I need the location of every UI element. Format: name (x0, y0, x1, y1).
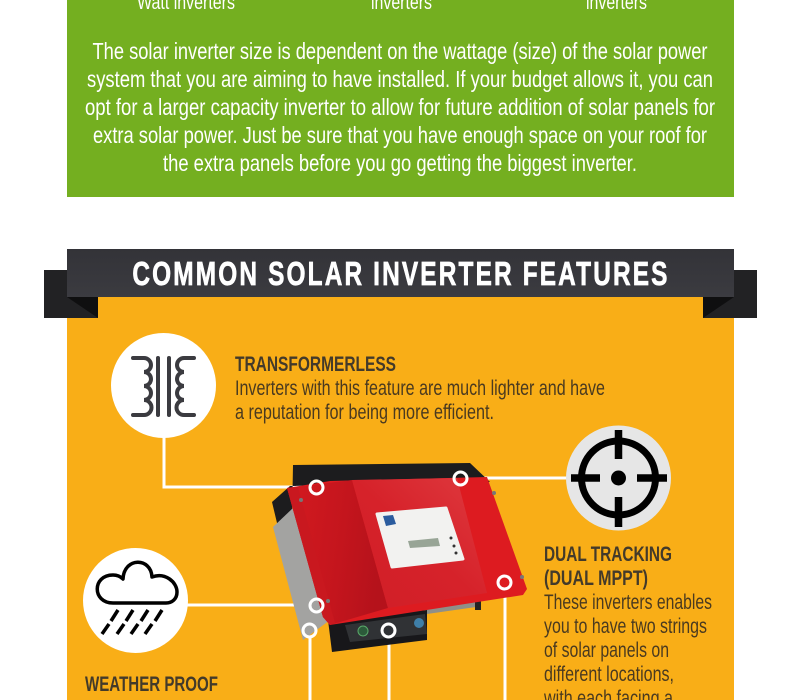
title: COMMON SOLAR INVERTER FEATURES (132, 257, 670, 293)
inverter size labels (137, 0, 647, 14)
panel: inverter size (green) (67, 0, 734, 197)
text: transformerless: Inverters with this feature are much lighter and have (235, 377, 605, 400)
paragraph: inverter sizing: the extra panels before you go getting the biggest inverter. (163, 150, 637, 176)
text: dual tracking: (DUAL MPPT) (544, 567, 648, 590)
heading ribbon (44, 249, 757, 318)
text: dual tracking (543, 543, 712, 700)
text: dual tracking: different locations, (544, 663, 674, 686)
text: transformerless (235, 353, 605, 424)
text: dual tracking: of solar panels on (544, 639, 669, 662)
text: dual tracking: DUAL TRACKING (544, 543, 672, 566)
text: dual tracking: These inverters enables (544, 591, 712, 614)
icon: crosshair target (566, 426, 671, 530)
text: transformerless: TRANSFORMERLESS (235, 353, 396, 376)
panel: features background (67, 297, 734, 700)
icon: transformer (111, 333, 216, 438)
text: transformerless: a reputation for being more efficient. (235, 401, 494, 424)
text: weather proof: WEATHER PROOF (85, 673, 218, 696)
callout dots (303, 472, 511, 637)
icon: rain cloud (83, 548, 188, 653)
paragraph: inverter sizing (85, 38, 715, 176)
connector lines (164, 430, 570, 700)
text: dual tracking: you to have two strings (544, 615, 707, 638)
illustration: red solar inverter (272, 463, 527, 652)
